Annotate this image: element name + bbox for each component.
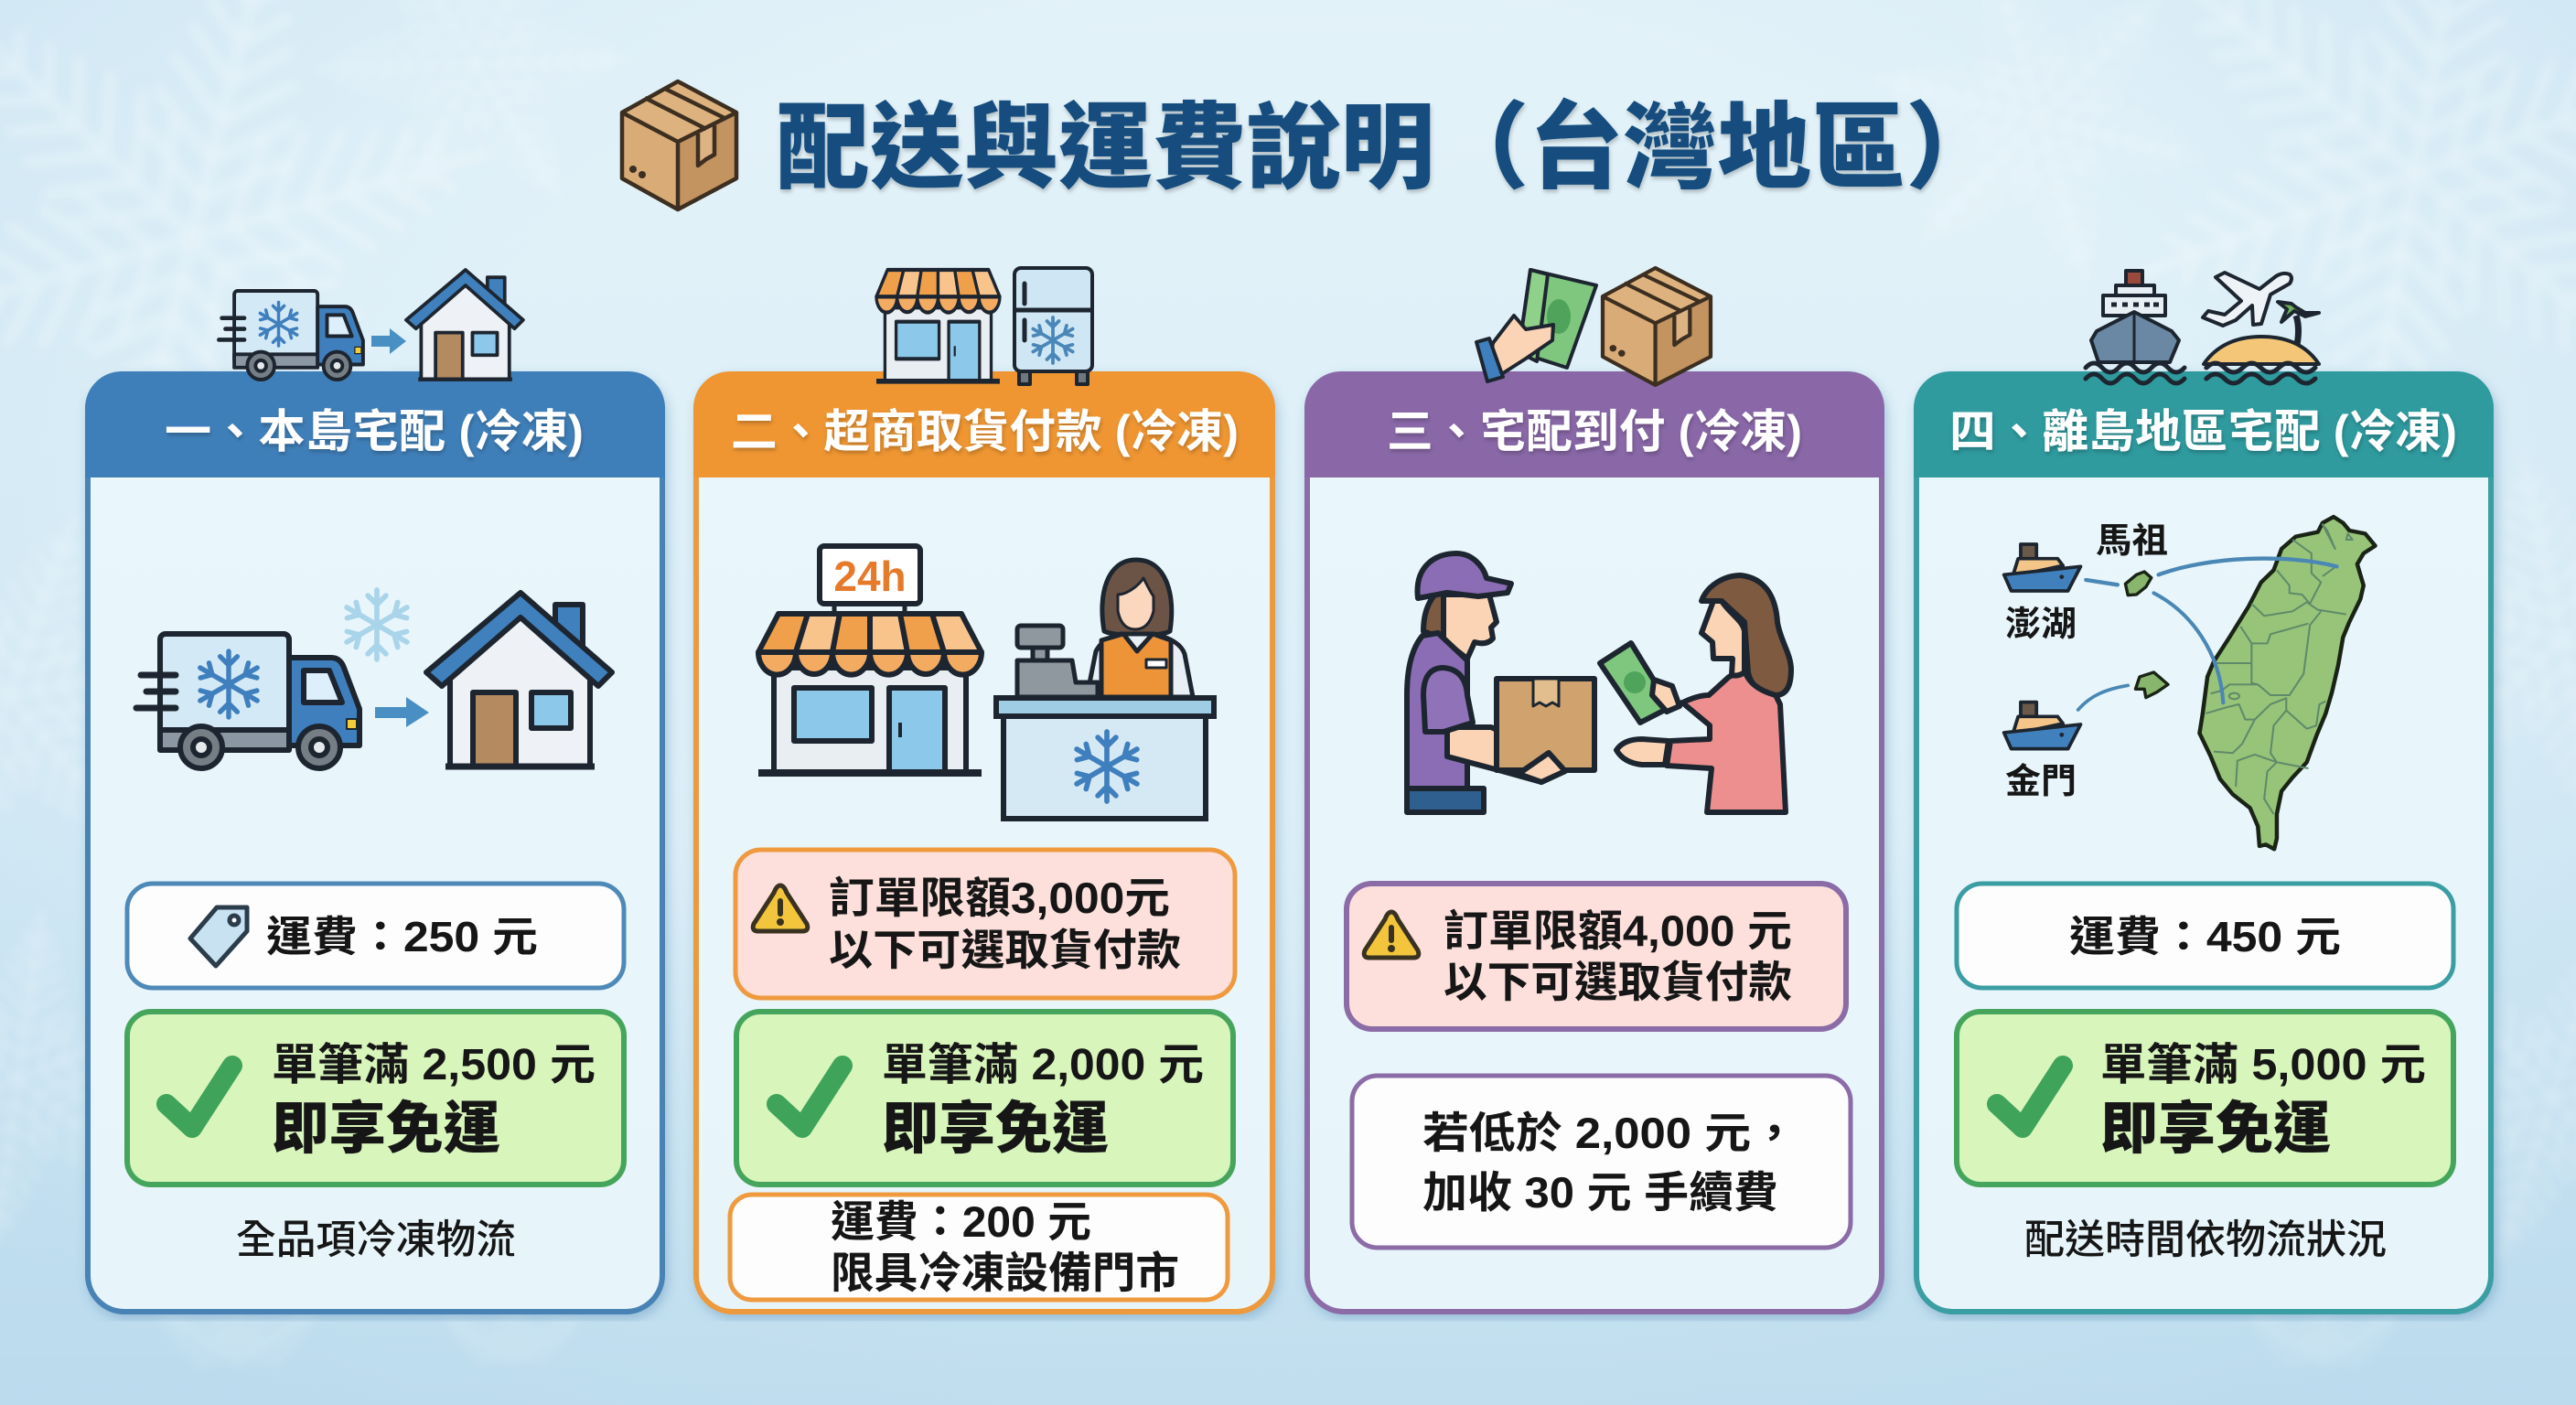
handling fee box	[1352, 1076, 1851, 1249]
illustration: truck to house	[136, 590, 612, 768]
warning box	[1347, 884, 1846, 1031]
free shipping text: 單筆滿 5,000 元	[2100, 1041, 2426, 1089]
fee box	[127, 884, 624, 990]
cash register	[1017, 626, 1098, 697]
icon: check mark	[166, 1066, 232, 1128]
header text: 三、宅配到付 (冷凍)	[1387, 406, 1802, 457]
icon: warning	[1364, 912, 1419, 958]
warning text	[1444, 906, 1792, 1006]
free shipping text	[2100, 1041, 2426, 1161]
handling fee text: 若低於 2,000 元，	[1422, 1109, 1798, 1157]
panel frame	[1916, 374, 2491, 1312]
bill	[1600, 643, 1680, 723]
routes	[2078, 559, 2336, 710]
map labels: 金門	[2005, 763, 2077, 801]
map labels: 馬祖	[2096, 522, 2168, 561]
courier	[1407, 553, 1565, 812]
panel header	[693, 371, 1275, 477]
warning text: 訂單限額3,000元	[829, 874, 1170, 922]
warning text: 以下可選取貨付款	[1444, 958, 1792, 1006]
panel frame	[696, 374, 1272, 1312]
fee box	[730, 1195, 1228, 1302]
map labels	[2005, 522, 2168, 801]
warning box	[735, 850, 1235, 1000]
title	[622, 81, 2000, 209]
store sign: 24h	[833, 552, 907, 600]
handling fee text: 加收 30 元 手續費	[1422, 1168, 1778, 1217]
free shipping text: 單筆滿 2,500 元	[272, 1041, 596, 1089]
counter	[996, 698, 1214, 819]
panel: 超商取貨付款	[693, 371, 1275, 1312]
free shipping text: 即享免運	[272, 1098, 500, 1161]
panel: 宅配到付	[1304, 371, 1884, 1312]
free shipping box	[1957, 1012, 2453, 1186]
fee text: 運費：250 元	[266, 913, 538, 960]
panel: 本島宅配	[85, 371, 665, 1312]
icon: Kinmen island	[2135, 672, 2168, 698]
fee text: 運費：450 元	[2069, 913, 2341, 960]
icon: Matsu island	[2125, 572, 2152, 595]
icon: small ship, plane and island	[2086, 271, 2319, 383]
cashier	[1087, 560, 1193, 697]
icon: check mark	[777, 1066, 843, 1128]
panel header	[85, 371, 665, 477]
small plane	[2203, 273, 2292, 326]
handling fee text	[1422, 1109, 1798, 1217]
free shipping text: 即享免運	[2100, 1098, 2331, 1161]
warning text: 訂單限額4,000 元	[1444, 906, 1792, 955]
small island	[2204, 302, 2319, 383]
warning text: 以下可選取貨付款	[829, 926, 1181, 974]
illustration: store and cashier	[758, 546, 1214, 819]
panel frame	[1307, 374, 1882, 1312]
panel frame	[88, 374, 662, 1312]
header text: 一、本島宅配 (冷凍)	[165, 406, 584, 457]
free shipping text	[882, 1041, 1204, 1161]
fee text: 限具冷凍設備門市	[831, 1249, 1179, 1297]
icon: small store and fridge	[876, 268, 1092, 384]
icon: small truck to house	[219, 270, 523, 380]
header text: 二、超商取貨付款 (冷凍)	[731, 406, 1239, 457]
icon: price tag	[190, 907, 247, 966]
free shipping box	[736, 1012, 1233, 1186]
small ship	[2086, 271, 2184, 383]
panel header	[1914, 371, 2494, 477]
customer	[1616, 575, 1791, 812]
store	[758, 614, 982, 773]
header text: 四、離島地區宅配 (冷凍)	[1949, 406, 2457, 457]
parcel	[1497, 679, 1594, 782]
fee box	[1957, 884, 2453, 990]
warning text	[829, 874, 1181, 974]
fee text: 運費：200 元	[831, 1197, 1091, 1246]
free shipping text: 單筆滿 2,000 元	[882, 1041, 1204, 1089]
store sign	[820, 546, 920, 615]
caption: 配送時間依物流狀況	[2024, 1217, 2387, 1262]
free shipping box	[127, 1012, 624, 1186]
icon: ships	[2004, 544, 2080, 749]
map labels: 澎湖	[2005, 606, 2077, 644]
icon: cardboard box	[622, 81, 736, 209]
illustration: courier and customer	[1407, 553, 1791, 812]
icon: Taiwan map	[2199, 517, 2376, 849]
title text: 配送與運費說明（台灣地區）	[776, 95, 2000, 200]
fee text	[831, 1197, 1179, 1297]
icon: warning	[753, 885, 808, 931]
caption: 全品項冷凍物流	[236, 1217, 516, 1262]
panel: 離島地區宅配	[1914, 371, 2494, 1312]
illustration: outlying islands map	[2004, 517, 2376, 849]
free shipping text	[272, 1041, 596, 1161]
icon: small cash and parcel	[1476, 268, 1711, 385]
free shipping text: 即享免運	[882, 1098, 1109, 1161]
icon: check mark	[1997, 1066, 2063, 1128]
panel header	[1304, 371, 1884, 477]
